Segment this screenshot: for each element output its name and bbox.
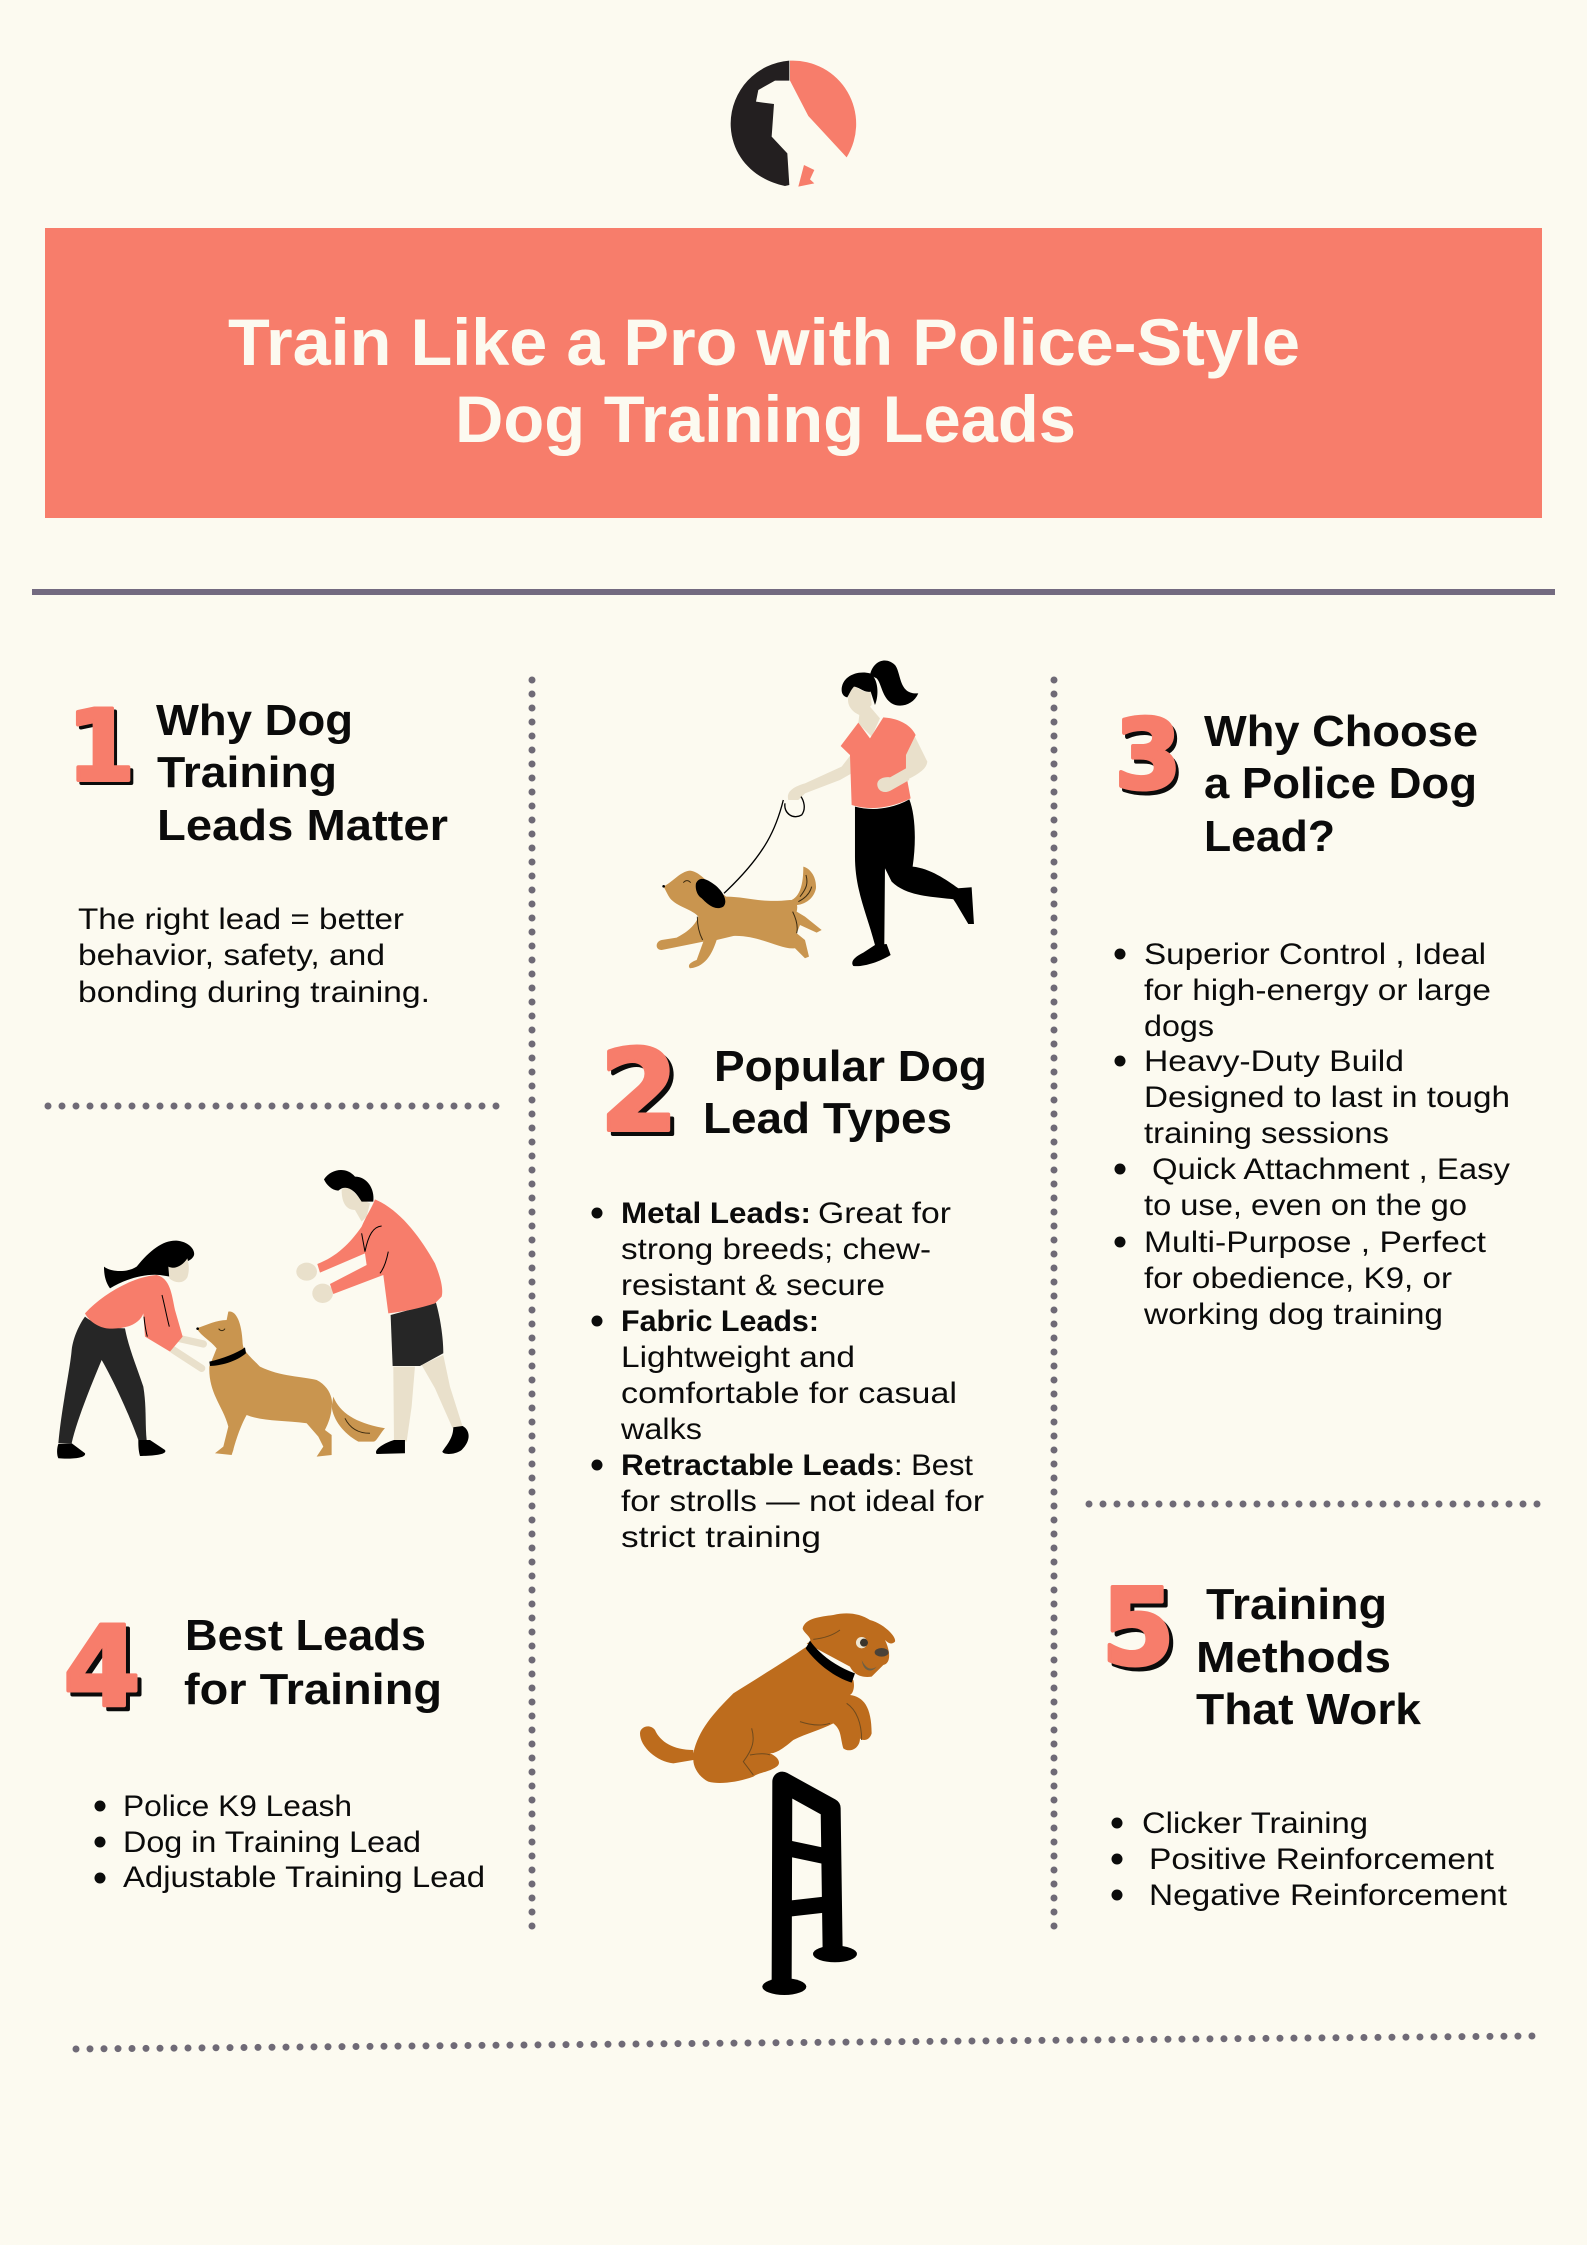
list 5: Clicker Training	[1142, 1807, 1368, 1840]
list 2: Metal Leads:	[621, 1197, 811, 1230]
heading 3: Why Choose	[1204, 707, 1478, 756]
heading 1: Training	[157, 748, 337, 797]
woman	[57, 1241, 203, 1459]
section 2: popular dog lead types	[592, 1027, 987, 1554]
list 2: Retractable Leads	[621, 1449, 894, 1482]
list 5: Negative Reinforcement	[1149, 1879, 1508, 1912]
list 2: resistant & secure	[621, 1269, 885, 1302]
list 2: for strolls — not ideal for	[621, 1485, 984, 1518]
number 1: 1	[67, 690, 135, 804]
list 3: Superior Control , Ideal	[1144, 938, 1486, 971]
title banner	[45, 228, 1542, 518]
number 3: 3	[1115, 699, 1181, 811]
dog	[196, 1311, 385, 1457]
list 3: for obedience, K9, or	[1144, 1262, 1452, 1295]
list 2: walks	[620, 1413, 702, 1446]
heading 1: Leads Matter	[157, 801, 448, 850]
illustration: dog jumping over hurdle	[640, 1613, 895, 1995]
heading 2	[703, 1042, 987, 1143]
title banner: Dog Training Leads	[455, 382, 1076, 456]
list 4: Adjustable Training Lead	[123, 1861, 485, 1894]
list 3: for high-energy or large	[1144, 974, 1491, 1007]
list 2: Lightweight and	[621, 1341, 855, 1374]
heading 3: a Police Dog	[1204, 759, 1477, 808]
hurdle	[762, 1782, 857, 1995]
body text 1: behavior, safety, and	[78, 939, 385, 972]
body text 1	[78, 903, 430, 1009]
list 3: dogs	[1144, 1010, 1214, 1043]
list 2: : Best	[894, 1449, 974, 1482]
number 5: 5	[1105, 1571, 1179, 1693]
illustration: woman walking dog on lead	[657, 661, 974, 968]
list 3: working dog training	[1143, 1298, 1443, 1331]
list 4	[94, 1790, 485, 1894]
heading 4: for Training	[184, 1665, 442, 1714]
jumping dog	[640, 1613, 895, 1783]
heading 5: Methods	[1196, 1633, 1391, 1682]
list 2: strong breeds; chew-	[621, 1233, 931, 1266]
heading 1: Why Dog	[156, 696, 353, 745]
list 2: Great for	[818, 1197, 951, 1230]
section 5: training methods that work	[1101, 1567, 1508, 1912]
number 2: 2	[604, 1031, 682, 1161]
section 3: why choose a police dog lead	[1114, 699, 1510, 1331]
body text 1: bonding during training.	[78, 976, 430, 1009]
list 4: Police K9 Leash	[123, 1790, 352, 1823]
section 4: best leads for training	[63, 1603, 485, 1894]
heading 3	[1204, 707, 1478, 861]
list 3: Heavy-Duty Build	[1144, 1045, 1404, 1078]
section 1: why dog training leads matter	[67, 690, 448, 1009]
list 5	[1112, 1807, 1508, 1912]
list 3: Quick Attachment , Easy	[1152, 1153, 1510, 1186]
title banner: Train Like a Pro with Police-Style	[228, 305, 1300, 379]
list 3	[1114, 938, 1510, 1331]
heading 5	[1196, 1580, 1422, 1734]
list 2: strict training	[621, 1521, 821, 1554]
number 1: 1	[70, 693, 138, 807]
list 4: Dog in Training Lead	[123, 1826, 421, 1859]
list 2: Fabric Leads:	[621, 1305, 819, 1338]
list 2	[592, 1197, 984, 1554]
number 3: 3	[1118, 703, 1184, 815]
illustration: couple greeting dog	[57, 1170, 469, 1459]
heading 1	[156, 696, 448, 850]
number 4: 4	[67, 1607, 145, 1736]
body text 1: The right lead = better	[78, 903, 404, 936]
list 3: Multi-Purpose , Perfect	[1144, 1226, 1487, 1259]
heading 5: Training	[1206, 1580, 1387, 1629]
number 2: 2	[600, 1027, 678, 1157]
heading 3: Lead?	[1204, 812, 1335, 861]
heading 4: Best Leads	[185, 1611, 426, 1660]
logo: dog silhouette in circle	[731, 61, 856, 187]
heading 2: Popular Dog	[714, 1042, 987, 1091]
list 2: comfortable for casual	[621, 1377, 957, 1410]
list 3: training sessions	[1144, 1117, 1389, 1150]
number 5: 5	[1101, 1567, 1175, 1689]
list 5: Positive Reinforcement	[1149, 1843, 1495, 1876]
list 3: to use, even on the go	[1144, 1189, 1467, 1222]
man	[296, 1170, 469, 1454]
heading 4	[184, 1611, 442, 1714]
heading 2: Lead Types	[703, 1094, 952, 1143]
number 4: 4	[63, 1603, 141, 1732]
heading 5: That Work	[1196, 1685, 1422, 1734]
list 3: Designed to last in tough	[1144, 1081, 1510, 1114]
